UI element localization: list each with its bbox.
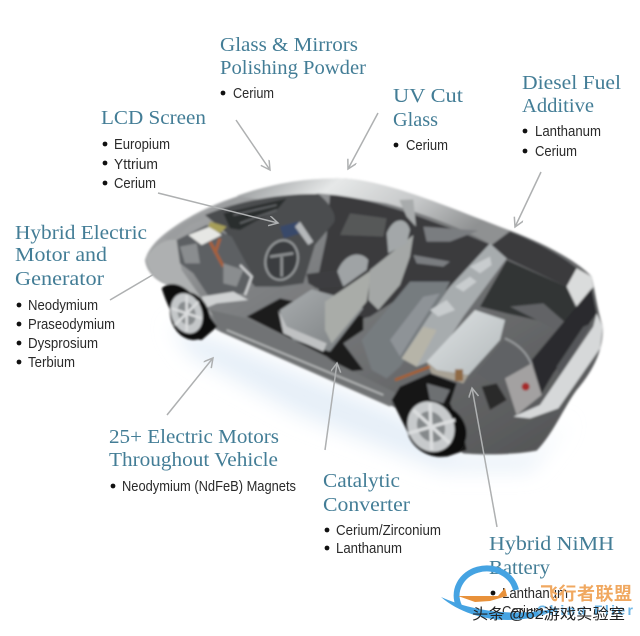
rear door panel: [413, 227, 478, 267]
label: hybrid electric motor and generator: Motor and: [15, 245, 107, 266]
arrow: lcd screen: [158, 193, 278, 223]
arrow: electric motors: [167, 358, 213, 415]
icon: watermark ring logo: [441, 568, 560, 620]
label: catalytic converter: Converter: [323, 495, 411, 516]
label: diesel fuel additive: [522, 73, 622, 160]
trunk interior: [480, 260, 577, 327]
front seat back: [325, 270, 372, 343]
label: lcd screen: Yttrium: [114, 156, 158, 173]
label: electric motors throughout vehicle: Throughout Vehicle: [109, 450, 278, 471]
arrow: uv cut glass: [348, 113, 378, 169]
label: uv cut glass: UV Cut: [393, 86, 464, 107]
label: lcd screen: [101, 108, 206, 192]
rear seat back: [402, 243, 507, 367]
label: diesel fuel additive: Lanthanum: [535, 123, 601, 140]
front fender highlight: [146, 240, 213, 317]
roof rear highlight: [567, 268, 593, 310]
label: uv cut glass: Cerium: [406, 137, 448, 154]
label: uv cut glass: [393, 86, 464, 154]
sill: [210, 310, 397, 407]
steering wheel: [261, 237, 302, 283]
label: hybrid electric motor and generator: Dysprosium: [28, 335, 98, 352]
watermark caption: 头条 @62游戏实验室: [472, 606, 625, 623]
label: lcd screen: Europium: [114, 136, 170, 153]
label: hybrid electric motor and generator: Neodymium: [28, 297, 98, 314]
label: catalytic converter: Catalytic: [323, 471, 400, 492]
dashboard: [205, 194, 335, 287]
label: hybrid electric motor and generator: Terbium: [28, 354, 75, 371]
rear floor panel: [477, 340, 533, 383]
engine and motor: [177, 222, 253, 308]
label: electric motors throughout vehicle: 25+ Electric Motors: [109, 427, 279, 448]
watermark orange text: 飞行者联盟: [540, 580, 632, 606]
label: hybrid nimh battery: Hybrid NiMH: [489, 534, 614, 555]
label: lcd screen: Cerium: [114, 175, 156, 192]
rear right wheel: [398, 393, 475, 467]
label: glass and mirrors polishing powder: [220, 35, 367, 102]
label: hybrid electric motor and generator: Hybrid Electric: [15, 223, 147, 244]
label: hybrid nimh battery: Lanthanum: [502, 585, 568, 602]
label: glass and mirrors polishing powder: Cerium: [233, 85, 274, 102]
label: hybrid electric motor and generator: [15, 223, 147, 371]
arrow: diesel fuel additive: [515, 172, 541, 227]
roof and windows: [237, 178, 510, 245]
rear bumper chrome: [513, 313, 603, 418]
car shadow: [170, 325, 570, 470]
LCD screen: [280, 222, 300, 238]
label: hybrid nimh battery: Cerium: [502, 603, 544, 620]
arrow: nimh battery: [472, 388, 497, 527]
tail lamp: [505, 363, 542, 415]
arrow: catalytic converter: [325, 363, 337, 450]
front seat cushion: [280, 289, 363, 352]
label: glass and mirrors polishing powder: Glass & Mirrors: [220, 35, 358, 56]
rear right dark wheel well: [392, 373, 467, 457]
rear cabin dark interior: [317, 195, 492, 327]
label: diesel fuel additive: Diesel Fuel: [522, 73, 622, 94]
watermark: [441, 568, 634, 623]
label: uv cut glass: Glass: [393, 110, 438, 131]
hood panel: [163, 196, 240, 240]
label: hybrid electric motor and generator: Praseodymium: [28, 316, 115, 333]
label: catalytic converter: Lanthanum: [336, 540, 402, 557]
label: glass and mirrors polishing powder: Polishing Powder: [220, 58, 367, 79]
label: electric motors throughout vehicle: Neodymium (NdFeB) Magnets: [122, 478, 296, 495]
suspension bracket: [482, 383, 507, 410]
label: diesel fuel additive: Cerium: [535, 143, 577, 160]
trunk lid dark panel: [492, 232, 577, 287]
car body shell: [145, 178, 603, 454]
label: hybrid nimh battery: Battery: [489, 558, 550, 579]
rear window dark: [532, 288, 597, 393]
orange cable: [395, 367, 430, 380]
label: electric motors throughout vehicle: [109, 427, 296, 495]
label: hybrid nimh battery: [489, 534, 614, 620]
label: hybrid electric motor and generator: Generator: [15, 269, 105, 290]
rear seat: [362, 282, 450, 378]
label: catalytic converter: [323, 471, 441, 557]
passenger seat back: [368, 235, 413, 310]
arrow: glass and mirrors: [236, 120, 270, 170]
label: diesel fuel additive: Additive: [522, 96, 594, 117]
watermark blue text: China Flier: [537, 602, 634, 618]
hybrid car cutaway illustration: [145, 178, 603, 467]
hybrid battery pack: [427, 310, 505, 383]
front left wheel: [162, 284, 217, 346]
label: catalytic converter: Cerium/Zirconium: [336, 522, 441, 539]
headrest: [337, 255, 368, 287]
label: lcd screen: LCD Screen: [101, 108, 206, 129]
floor: [247, 298, 363, 372]
arrow: hybrid electric motor: [110, 267, 166, 300]
